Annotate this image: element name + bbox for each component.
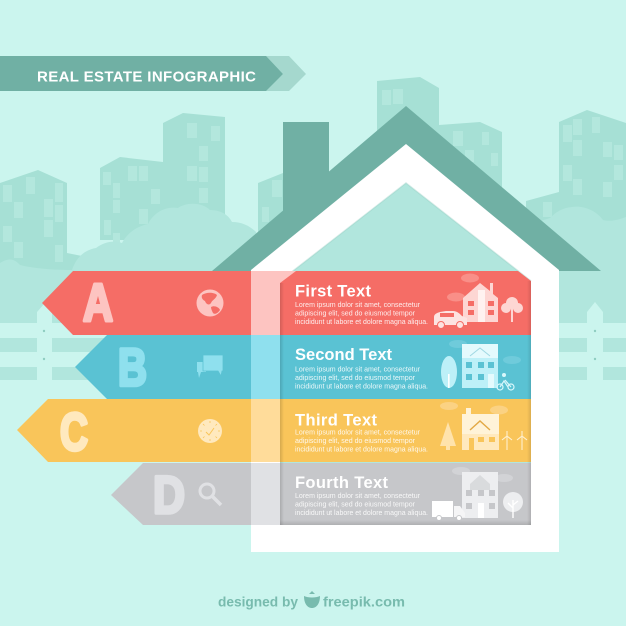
description: fourth text: Lorem ipsum dolor sit amet, consectetur xyxy=(295,491,420,500)
illustration: house, car and tree xyxy=(434,274,523,328)
description: third text: adipiscing elit, sed do eiusmod tempor xyxy=(295,436,415,445)
band A xyxy=(42,271,531,335)
fence xyxy=(0,302,626,380)
description: third text: incididunt ut labore et dolore magna aliqua. xyxy=(295,444,428,454)
background skyline xyxy=(0,77,626,275)
icon: magnifier xyxy=(200,484,221,505)
band B: B xyxy=(118,338,147,398)
description: fourth text xyxy=(295,491,428,517)
description: second text xyxy=(295,364,428,390)
heading: third text: Third Text xyxy=(295,412,378,430)
band C: C xyxy=(60,403,88,462)
band B xyxy=(75,335,531,399)
description: first text: Lorem ipsum dolor sit amet, consectetur xyxy=(295,300,420,309)
description: fourth text: incididunt ut labore et dolore magna aliqua. xyxy=(295,508,428,517)
freepik credit xyxy=(218,591,405,610)
description: fourth text: adipiscing elit, sed do eiusmod tempor xyxy=(295,500,415,508)
heading: fourth text: Fourth Text xyxy=(295,474,388,492)
band A: A xyxy=(83,274,113,333)
illustration: building, tree and cyclist xyxy=(441,340,521,390)
interior shading on walls xyxy=(280,281,531,525)
description: third text xyxy=(295,428,428,454)
freepik credit: designed by xyxy=(218,594,298,610)
description: first text xyxy=(295,300,428,326)
description: second text: incididunt ut labore et dolore magna aliqua. xyxy=(295,382,428,390)
house roof and chimney xyxy=(212,106,601,271)
title ribbon: REAL ESTATE INFOGRAPHIC xyxy=(37,68,256,86)
icon: globe xyxy=(196,290,224,316)
illustration: townhouse, truck and tree xyxy=(432,467,523,520)
white house frame xyxy=(251,144,559,552)
icon: clock xyxy=(198,419,222,443)
illustration: cottage, pine tree and wind turbines xyxy=(440,402,527,450)
icon: speech bubbles xyxy=(197,355,223,378)
description: second text: Lorem ipsum dolor sit amet, consectetur xyxy=(295,364,420,374)
heading: first text: First Text xyxy=(295,282,372,300)
band D xyxy=(111,463,531,525)
description: first text: incididunt ut labore et dolore magna aliqua. xyxy=(295,317,428,326)
title ribbon xyxy=(0,56,306,91)
description: first text: adipiscing elit, sed do eiusmod tempor xyxy=(295,308,415,318)
band D: D xyxy=(153,466,185,525)
band C xyxy=(17,399,531,462)
background bushes and ground xyxy=(0,204,626,380)
house interior xyxy=(280,183,531,524)
heading: second text: Second Text xyxy=(295,346,392,364)
description: third text: Lorem ipsum dolor sit amet, consectetur xyxy=(295,428,420,436)
icon: freepik logo xyxy=(304,591,320,608)
freepik credit: freepik.com xyxy=(323,594,405,610)
description: second text: adipiscing elit, sed do eiusmod tempor xyxy=(295,373,415,382)
